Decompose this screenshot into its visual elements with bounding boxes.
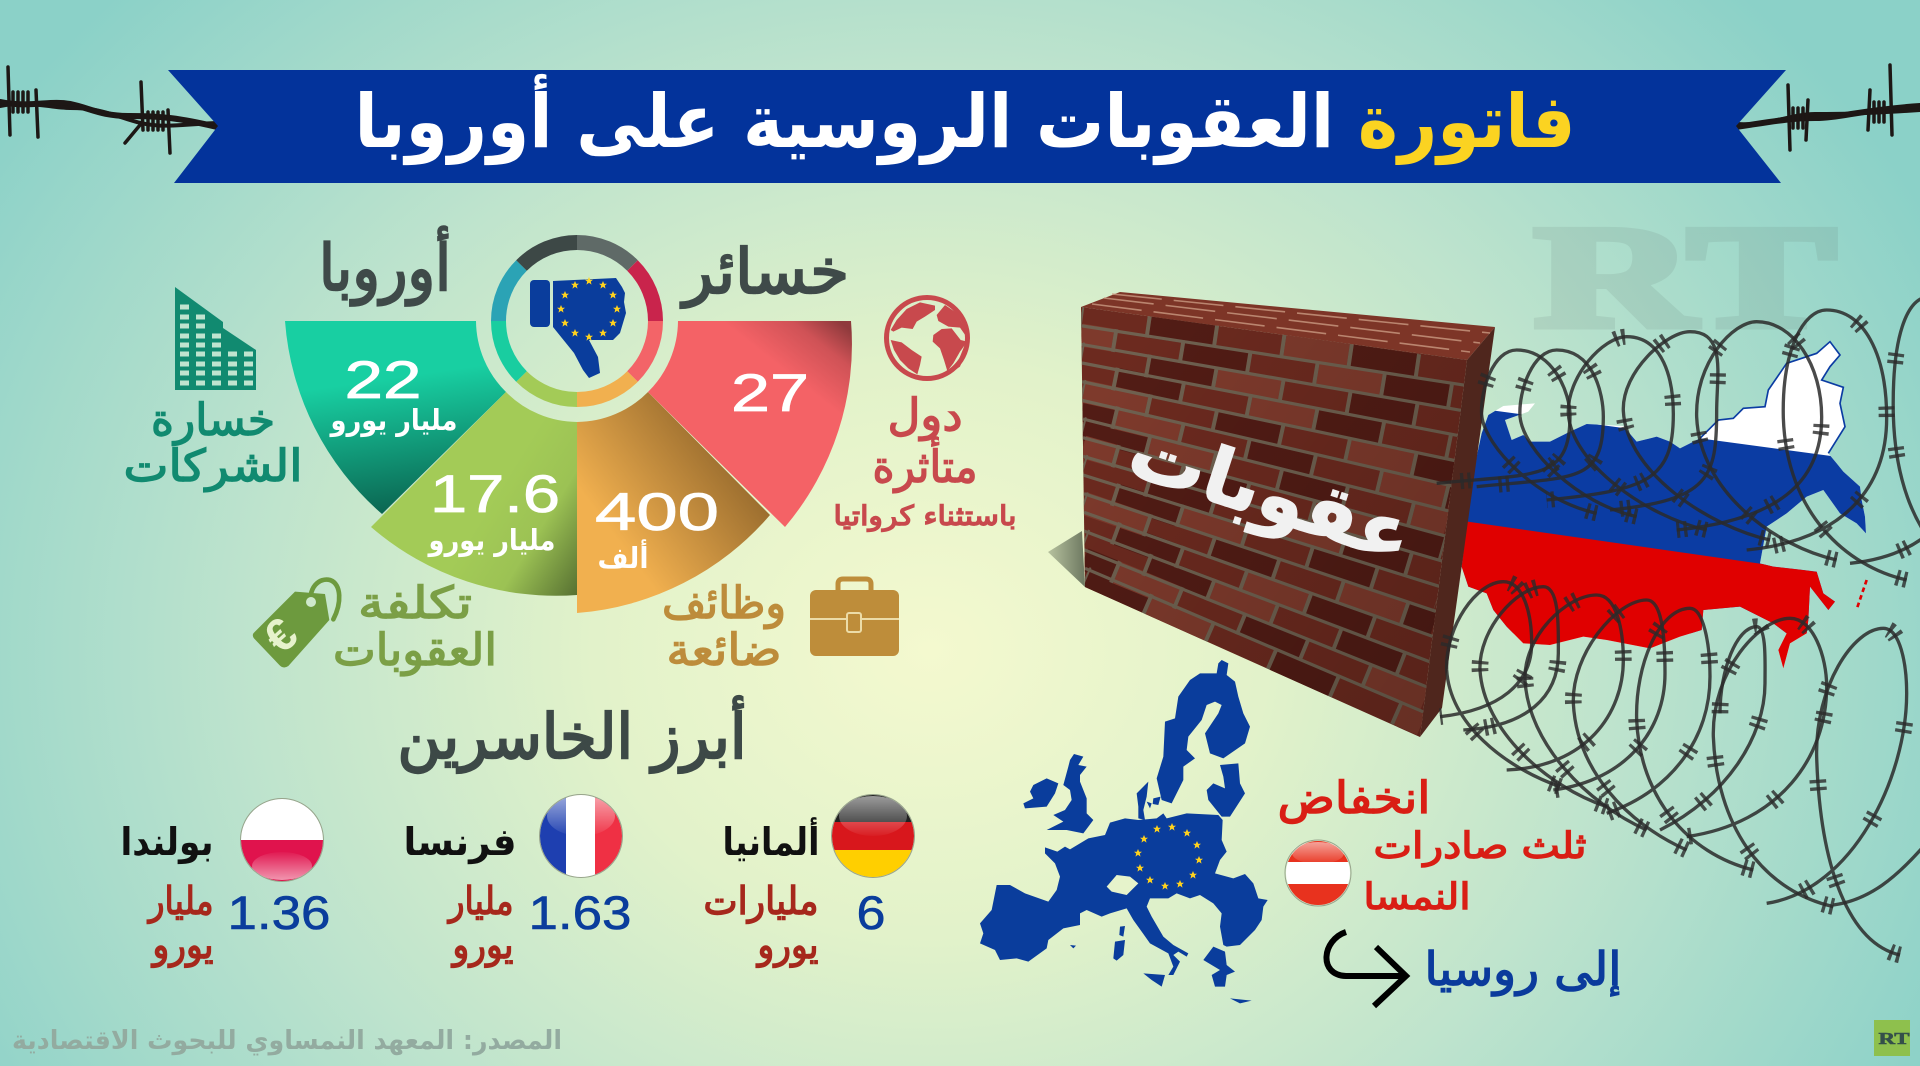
razor wire upper coil (1437, 297, 1920, 593)
label: Germany: 6 (856, 886, 886, 939)
label: Poland: يورو (151, 923, 214, 968)
icon: building (175, 287, 256, 390)
EU stars (1134, 823, 1203, 890)
label: billion euro: مليار يورو (329, 403, 458, 437)
label: Germany (704, 817, 886, 968)
icon: globe (886, 298, 969, 378)
callout text: ثلث صادرات (1374, 826, 1586, 867)
label: sanctions cost: تكلفة (358, 578, 472, 629)
label: France: 1.63 (528, 886, 632, 939)
flag: France (538, 794, 625, 878)
value: 400: 400 (595, 483, 719, 542)
label: Germany: ألمانيا (722, 817, 820, 864)
label: billion euro: مليار يورو (427, 523, 556, 557)
label: affected countries (834, 390, 1016, 532)
label: to Russia: إلى روسيا (1424, 942, 1622, 997)
label: company losses (124, 395, 302, 492)
label: Germany: يورو (756, 923, 818, 968)
icon: price tag (253, 580, 339, 667)
label: lost jobs: وظائف (662, 578, 786, 629)
label: company losses: الشركات (124, 441, 302, 492)
RT logo: RT (1878, 1029, 1910, 1048)
wall shadow (1048, 531, 1085, 587)
barbed wire right (1736, 65, 1920, 150)
wall right side (1420, 327, 1495, 737)
banner title: فاتورة العقوبات الروسية على أوروبا (354, 73, 1576, 166)
barbed wire left (0, 67, 217, 153)
label: thousand: ألف (598, 539, 648, 575)
flag: Germany (830, 794, 916, 878)
label: Poland: مليار (147, 879, 214, 923)
arrow to Russia (1326, 932, 1406, 1006)
wall top (1081, 292, 1495, 360)
callout: Austria exports (1278, 773, 1622, 1006)
wall front (1081, 307, 1467, 737)
label: France: مليار (447, 879, 514, 923)
map: European Union (980, 660, 1268, 1003)
label: Poland (120, 820, 330, 968)
sector: company losses (285, 321, 506, 514)
brick wall (1048, 290, 1500, 740)
value: 17.6: 17.6 (430, 465, 560, 524)
label: France: يورو (451, 923, 514, 968)
label: Germany: مليارات (704, 879, 818, 923)
wall text: sanctions: عقوبات (1118, 405, 1424, 581)
Switzerland gap (1107, 875, 1138, 895)
label: company losses: خسارة (151, 395, 275, 446)
flag: Austria (1284, 840, 1352, 908)
sector: lost jobs (577, 392, 770, 613)
banner ribbon (168, 70, 1786, 183)
source note: المصدر: المعهد النمساوي للبحوث الاقتصادية (12, 1026, 562, 1056)
label: France: فرنسا (404, 820, 516, 864)
label: affected countries: دول (888, 390, 962, 441)
pie chart (285, 242, 852, 613)
value: 22: 22 (344, 351, 422, 410)
ring (498, 242, 656, 400)
heading: losses: خسائر (680, 235, 849, 308)
label: sanctions cost: العقوبات (333, 625, 497, 676)
label: lost jobs (662, 578, 786, 676)
label: affected countries: متأثرة (872, 436, 978, 493)
sector: sanctions cost (371, 392, 577, 596)
title banner (168, 70, 1786, 183)
value: 27: 27 (731, 364, 809, 423)
label: sanctions cost (333, 578, 497, 676)
icon: price tag: € (253, 607, 307, 663)
icon: thumbs down with EU stars (530, 277, 626, 378)
callout heading: انخفاض (1278, 773, 1430, 824)
icon: briefcase (810, 579, 899, 656)
label: Poland: 1.36 (228, 886, 330, 939)
RT logo (1874, 1020, 1910, 1056)
razor wire lower coil (1440, 582, 1920, 955)
label: affected countries: باستثناء كرواتيا (834, 501, 1016, 532)
label: France (404, 820, 632, 968)
heading: top losers: أبرز الخاسرين (398, 696, 746, 773)
label: Poland: بولندا (120, 820, 214, 864)
callout country: النمسا (1364, 877, 1470, 918)
flag: Poland (240, 798, 324, 883)
map: Russia flag (1462, 340, 1868, 668)
watermark RT: RT (1534, 196, 1836, 358)
label: lost jobs: ضائعة (666, 625, 782, 676)
heading: Europe: أوروبا (319, 226, 451, 306)
sector: affected countries (648, 321, 852, 527)
